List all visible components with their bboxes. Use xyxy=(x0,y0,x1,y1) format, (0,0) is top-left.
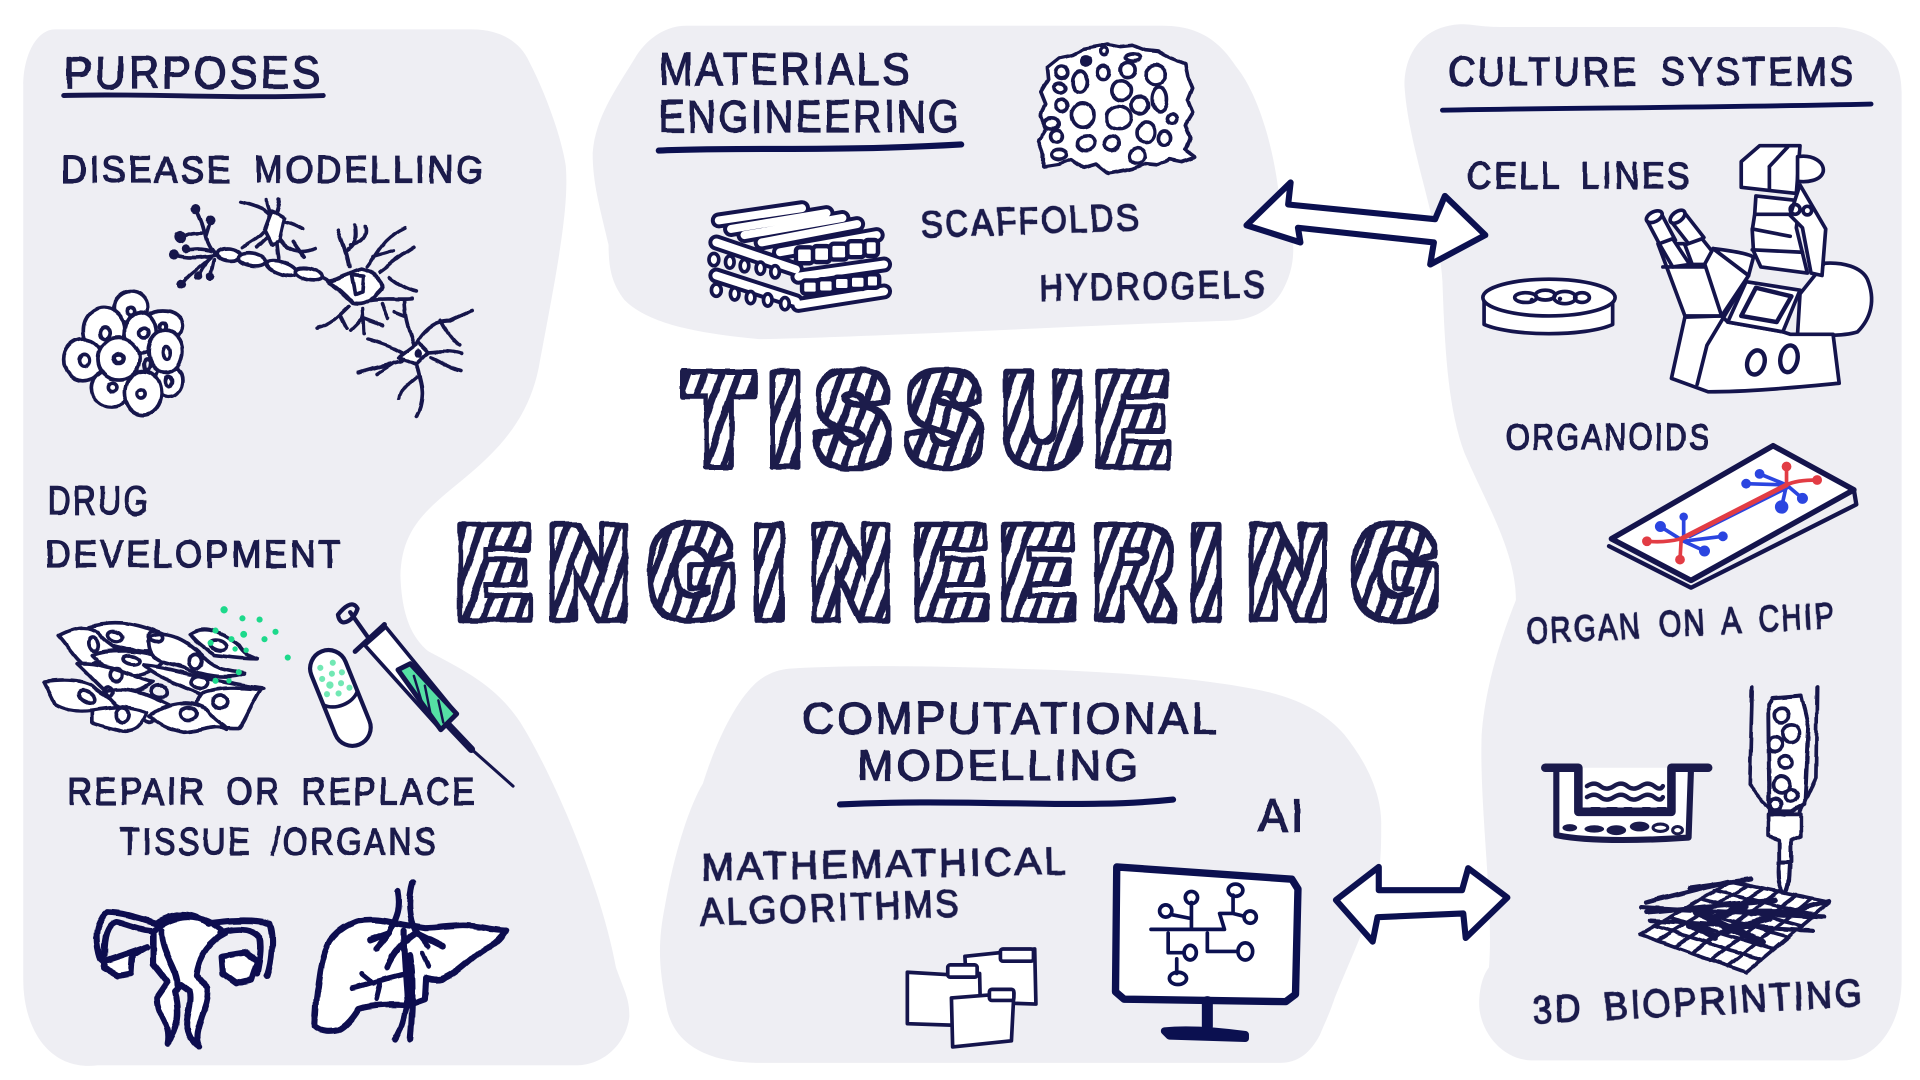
heading: materials engineering: MATERIALS xyxy=(659,43,912,94)
label: drug: DRUG xyxy=(48,477,151,523)
icon: cell culture insert xyxy=(1545,768,1708,840)
arrow: materials to culture systems xyxy=(1247,182,1485,264)
panel background: computational modelling xyxy=(660,666,1381,1063)
icon: neurons xyxy=(169,200,473,416)
circuit diagram xyxy=(1151,884,1256,984)
icon: computer monitor xyxy=(1116,867,1298,1038)
title: tissue engineering xyxy=(458,351,1438,641)
title: tissue engineering: TISSUE xyxy=(686,351,1168,488)
microscope eyepieces xyxy=(1644,208,1712,267)
arrow: computational to culture systems xyxy=(1336,867,1507,942)
panel background: purposes xyxy=(23,29,629,1066)
heading: materials engineering: ENGINEERING xyxy=(659,91,961,142)
label: mathemathical algorithms: MATHEMATHICAL xyxy=(701,840,1069,889)
heading: computational modelling xyxy=(802,694,1220,804)
icon: cell sheet xyxy=(44,623,263,732)
icon: organ on a chip xyxy=(1609,446,1856,588)
label: organ on a chip: ORGAN ON A CHIP xyxy=(1525,595,1837,652)
green drug particles xyxy=(208,606,291,684)
heading: purposes: PURPOSES xyxy=(64,47,323,98)
icon: cell cluster xyxy=(64,291,182,415)
icon: data folders xyxy=(907,949,1036,1047)
label: 3d bioprinting: 3D BIOPRINTING xyxy=(1531,972,1866,1033)
icon: hydrogel sponge xyxy=(1038,44,1195,174)
label: repair or replace: REPAIR OR REPLACE xyxy=(67,771,478,813)
label: organoids: ORGANOIDS xyxy=(1506,416,1712,457)
icon: printed grid xyxy=(1640,879,1829,972)
panel background: culture systems xyxy=(1404,24,1902,1060)
heading: computational modelling: COMPUTATIONAL xyxy=(802,694,1220,743)
title: tissue engineering: ENGINEERING xyxy=(458,504,1438,641)
panel: culture systems xyxy=(1404,24,1902,1060)
icon: liver xyxy=(315,883,506,1040)
panel background: materials engineering xyxy=(593,26,1293,339)
icon: syringe xyxy=(338,604,513,786)
label: hydrogels: HYDROGELS xyxy=(1039,264,1267,310)
panel: computational modelling xyxy=(660,666,1381,1063)
heading: materials engineering xyxy=(659,43,961,151)
icon: petri dish xyxy=(1483,279,1615,334)
icon: microscope xyxy=(1644,146,1872,392)
label: ai: AI xyxy=(1258,789,1307,841)
label: cell lines: CELL LINES xyxy=(1467,156,1692,198)
label: tissue / organs: TISSUE /ORGANS xyxy=(120,822,438,864)
heading: computational modelling: MODELLING xyxy=(857,742,1141,790)
label: disease modelling: DISEASE MODELLING xyxy=(61,149,486,191)
label: mathemathical algorithms: ALGORITHMS xyxy=(699,883,963,935)
panel: materials engineering xyxy=(593,26,1293,339)
label: development: DEVELOPMENT xyxy=(45,534,343,576)
heading: culture systems: CULTURE SYSTEMS xyxy=(1449,49,1856,95)
icon: pill capsule xyxy=(305,645,376,751)
panel: purposes xyxy=(23,29,629,1066)
icon: bioprinter xyxy=(1750,687,1817,895)
icon: scaffold logs xyxy=(709,208,884,310)
icon: uterus xyxy=(97,912,272,1047)
label: scaffolds: SCAFFOLDS xyxy=(920,197,1141,247)
label: mathemathical algorithms xyxy=(699,840,1069,935)
